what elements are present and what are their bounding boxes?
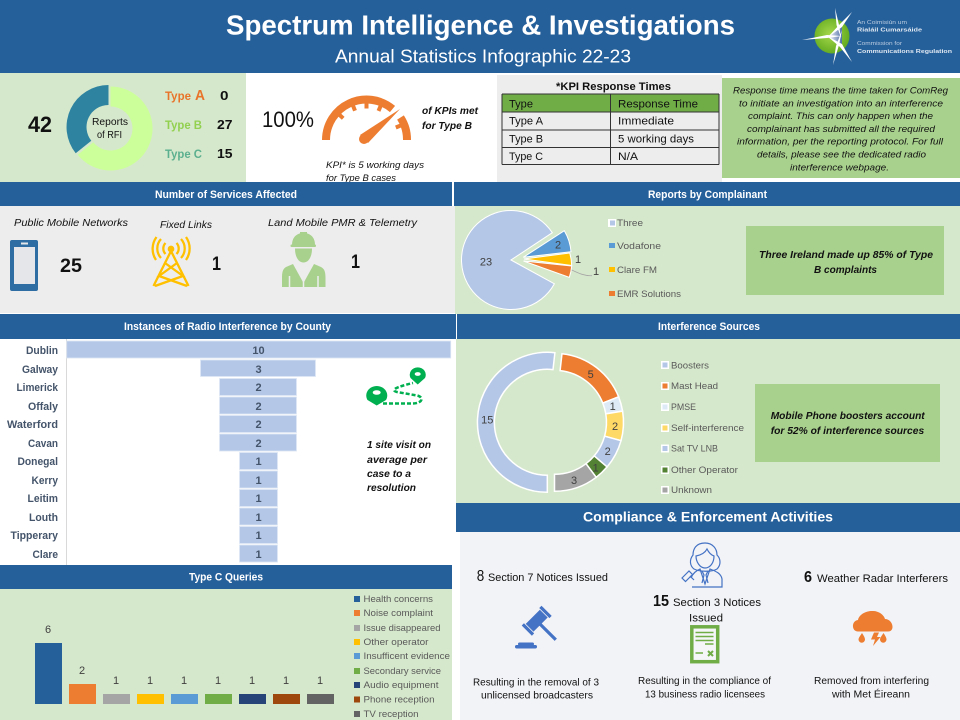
icon: map route with pins [366, 367, 426, 406]
section 7 outcome: unlicensed broadcasters [481, 690, 593, 702]
funnel bar chart: counties: 1 [255, 530, 262, 542]
heading: Interference Sources [658, 321, 760, 333]
icon: gavel [515, 606, 566, 650]
bar chart legend: Issue disappeared [364, 623, 440, 634]
funnel bar chart: counties: Leitim [28, 493, 58, 505]
bar chart: type C queries: 1 [181, 675, 187, 687]
panel: type C queries [0, 565, 452, 720]
KPI caption: of KPIs met [422, 105, 478, 117]
type breakdown: A [195, 88, 205, 104]
logo wordmark: Rialáil Cumarsáide [857, 28, 922, 34]
funnel bar chart: counties: 3 [255, 364, 262, 376]
donut legend: Sat TV LNB [671, 444, 718, 454]
funnel bar chart: counties: Waterford [7, 419, 58, 431]
donut legend: Self-interference [671, 423, 744, 434]
heading: Reports by Complainant [648, 189, 767, 201]
funnel bar chart: counties: 1 [255, 512, 262, 524]
bar chart: type C queries: 2 [79, 665, 85, 677]
bar chart: type C queries: 1 [317, 675, 323, 687]
icon: speedometer gauge [326, 100, 407, 144]
pie chart: complainants: 1 [593, 266, 599, 278]
callout: boosters share: Mobile Phone boosters account [771, 410, 925, 422]
section 7 notices [477, 568, 608, 585]
callout: boosters share: for 52% of interference sources [771, 425, 924, 437]
pie legend: Clare FM [617, 265, 657, 276]
heading: Type C Queries [189, 572, 263, 584]
panel: interference sources [456, 314, 960, 503]
section 7 notices: 8 [477, 568, 484, 585]
donut chart: interference sources: 1 [610, 401, 616, 413]
funnel bar chart: counties: 1 [255, 493, 262, 505]
title: Spectrum Intelligence & Investigations [226, 10, 735, 40]
donut chart: interference sources: 5 [588, 369, 594, 381]
panel: number of services affected [0, 182, 455, 313]
section 3 outcome [638, 676, 771, 700]
donut legend: Mast Head [671, 381, 718, 392]
bar chart: type C queries: 1 [113, 675, 119, 687]
weather radar outcome: Removed from interfering [814, 676, 929, 687]
site visit note: case to a [367, 468, 411, 480]
funnel bar chart: counties: 2 [255, 401, 262, 413]
donut legend: Unknown [671, 485, 712, 496]
type breakdown [165, 88, 232, 161]
table: Type A [509, 116, 544, 128]
bar chart legend [354, 594, 450, 720]
KPI footnote [326, 160, 424, 184]
callout: response time definition: complaint. This can only happen when the [748, 111, 933, 122]
bar chart: type C queries: 6 [45, 624, 51, 636]
table: N/A [618, 151, 639, 163]
KPI footnote: for Type B cases [326, 173, 396, 184]
bar chart: type C queries: 1 [147, 675, 153, 687]
funnel bar chart: counties: Offaly [28, 401, 59, 413]
panel: KPI response times table [497, 75, 722, 182]
funnel bar chart: counties: Tipperary [10, 530, 59, 542]
site visit note: average per [367, 454, 428, 466]
bar chart legend: TV reception [364, 709, 418, 720]
bar chart legend: Health concerns [364, 594, 433, 605]
bar chart legend: Audio equipment [364, 680, 439, 691]
site visit note: resolution [367, 482, 416, 494]
table: 5 working days [618, 134, 695, 146]
callout: response time definition: interference webpage. [790, 162, 889, 174]
table title: *KPI Response Times [556, 81, 671, 93]
donut legend: PMSE [671, 402, 696, 413]
section 3 notices: Section 3 Notices [673, 597, 762, 609]
value: public mobile networks: 25 [60, 256, 82, 277]
table: Type [509, 98, 533, 110]
weather radar outcome [814, 676, 929, 700]
section 7 outcome: Resulting in the removal of 3 [473, 678, 600, 688]
panel: compliance and enforcement [456, 503, 960, 720]
pie chart: complainants: 2 [555, 240, 561, 252]
callout: boosters share [755, 384, 940, 462]
donut chart: report types: of RFI [97, 130, 122, 141]
panel: radio interference by county [0, 314, 456, 565]
logo wordmark: Commission for [857, 41, 902, 47]
funnel bar chart: counties: Cavan [28, 438, 58, 450]
table: Type C [509, 151, 543, 163]
type breakdown: Type [165, 89, 191, 103]
pie legend: Three [617, 218, 643, 229]
pie legend: EMR Solutions [617, 289, 681, 300]
bar chart legend: Other operator [364, 637, 428, 648]
subtitle: Annual Statistics Infographic 22-23 [335, 46, 631, 66]
icon: storm cloud [853, 611, 892, 646]
funnel bar chart: counties: 1 [255, 475, 262, 487]
funnel bar chart: counties: Clare [32, 549, 58, 561]
donut chart: report types [67, 85, 153, 170]
site visit note [367, 439, 431, 494]
value: land mobile: 1 [351, 252, 360, 273]
logo wordmark [857, 20, 953, 55]
weather radar interferers [804, 569, 949, 586]
icon: lawyer [682, 543, 722, 587]
donut chart: interference sources [477, 352, 624, 492]
donut chart: interference sources: 2 [612, 421, 618, 433]
table: Immediate [618, 116, 674, 128]
KPI footnote: KPI* is 5 working days [326, 160, 424, 171]
bar chart: type C queries: 1 [249, 675, 255, 687]
KPI percentage: 100% [262, 107, 314, 132]
donut chart: interference sources: 15 [481, 414, 493, 426]
panel: reports by complainant [454, 182, 960, 314]
type breakdown: Type B [165, 118, 202, 132]
heading: Instances of Radio Interference by County [124, 321, 332, 333]
KPI caption [422, 105, 478, 132]
callout: response time definition: complainant has submitted all the required [747, 124, 936, 135]
funnel bar chart: counties [7, 339, 451, 565]
bar chart legend: Insufficent evidence [364, 651, 450, 662]
section 3 notices: 15 [653, 593, 669, 610]
callout: response time definition [722, 78, 960, 178]
pie chart: complainants [462, 210, 599, 309]
panel: reports of RFI [0, 73, 246, 182]
funnel bar chart: counties: 1 [255, 456, 262, 468]
donut chart: report types: Reports [92, 117, 128, 128]
icon: worker with hard hat [282, 232, 326, 288]
service label: public mobile networks: Public Mobile Networks [14, 217, 129, 229]
bar chart legend: Phone reception [364, 694, 434, 706]
type breakdown: 15 [217, 146, 232, 161]
callout: Three Ireland share [746, 226, 944, 295]
section 3 outcome: 13 business radio licensees [645, 690, 765, 700]
type breakdown: 27 [217, 117, 232, 132]
bar chart legend: Noise complaint [364, 608, 433, 619]
icon: ComReg logo [802, 8, 852, 65]
callout: response time definition: details, please see the dedicated radio [757, 150, 926, 160]
callout: response time definition: to initiate an investigation into an interference [739, 98, 943, 110]
donut legend: Boosters [671, 360, 709, 372]
pie legend [608, 218, 681, 300]
service label: land mobile: Land Mobile PMR & Telemetry [268, 217, 418, 229]
heading: Number of Services Affected [155, 189, 297, 201]
logo wordmark: An Coimisiún um [857, 20, 907, 26]
pie chart: complainants: 23 [480, 256, 492, 268]
icon: compliance document [692, 627, 718, 662]
funnel bar chart: counties: 10 [252, 345, 265, 357]
funnel bar chart: counties: Louth [29, 512, 58, 524]
funnel bar chart: counties: Galway [22, 364, 59, 376]
funnel bar chart: counties: 1 [255, 549, 262, 561]
callout: Three Ireland share: B complaints [814, 264, 877, 276]
section 3 notices [653, 593, 762, 625]
value: fixed links: 1 [212, 254, 221, 275]
callout: response time definition: Response time means the time taken for ComReg [733, 86, 949, 96]
pie chart: complainants: 1 [575, 254, 581, 266]
callout: Three Ireland share: Three Ireland made up 85% of Type [759, 249, 933, 261]
donut chart: interference sources: 3 [571, 475, 577, 487]
funnel bar chart: counties: 2 [255, 382, 262, 394]
donut legend [661, 360, 744, 496]
funnel bar chart: counties: Kerry [32, 475, 59, 487]
weather radar interferers: Weather Radar Interferers [817, 573, 949, 585]
type breakdown: 0 [220, 88, 228, 103]
section 3 notices: Issued [689, 613, 723, 625]
funnel bar chart: counties: Donegal [18, 456, 58, 468]
type breakdown: Type C [165, 147, 202, 161]
donut chart: interference sources: 2 [605, 446, 611, 458]
donut legend: Other Operator [671, 465, 738, 476]
header banner [0, 0, 960, 73]
icon: mobile phone [10, 240, 38, 291]
section 7 outcome [473, 678, 600, 702]
logo wordmark: Communications Regulation [857, 49, 953, 55]
service label: fixed links: Fixed Links [160, 219, 213, 231]
donut chart: interference sources: 1 [593, 462, 599, 474]
funnel bar chart: counties: 2 [255, 419, 262, 431]
bar chart: type C queries: 1 [283, 675, 289, 687]
funnel bar chart: counties: Dublin [26, 345, 58, 357]
site visit note: 1 site visit on [367, 439, 431, 451]
KPI caption: for Type B [422, 120, 472, 132]
table: Type B [509, 134, 543, 146]
funnel bar chart: counties: Limerick [16, 382, 59, 394]
table: Response Time [618, 98, 698, 110]
section 3 outcome: Resulting in the compliance of [638, 676, 771, 687]
funnel bar chart: counties: 2 [255, 438, 262, 450]
bar chart: type C queries: 1 [215, 675, 221, 687]
bar chart: type C queries [35, 624, 334, 704]
table [502, 94, 719, 164]
pie legend: Vodafone [617, 241, 661, 252]
weather radar interferers: 6 [804, 569, 812, 586]
bar chart legend: Secondary service [364, 666, 441, 677]
panel: KPI gauge [262, 100, 478, 184]
total reports number: 42 [28, 112, 52, 137]
icon: radio tower [153, 237, 190, 286]
weather radar outcome: with Met Éireann [831, 690, 910, 700]
callout: response time definition: information, per the reporting protocol. For full [737, 136, 944, 148]
heading: Compliance & Enforcement Activities [583, 509, 833, 525]
section 7 notices: Section 7 Notices Issued [488, 572, 608, 584]
